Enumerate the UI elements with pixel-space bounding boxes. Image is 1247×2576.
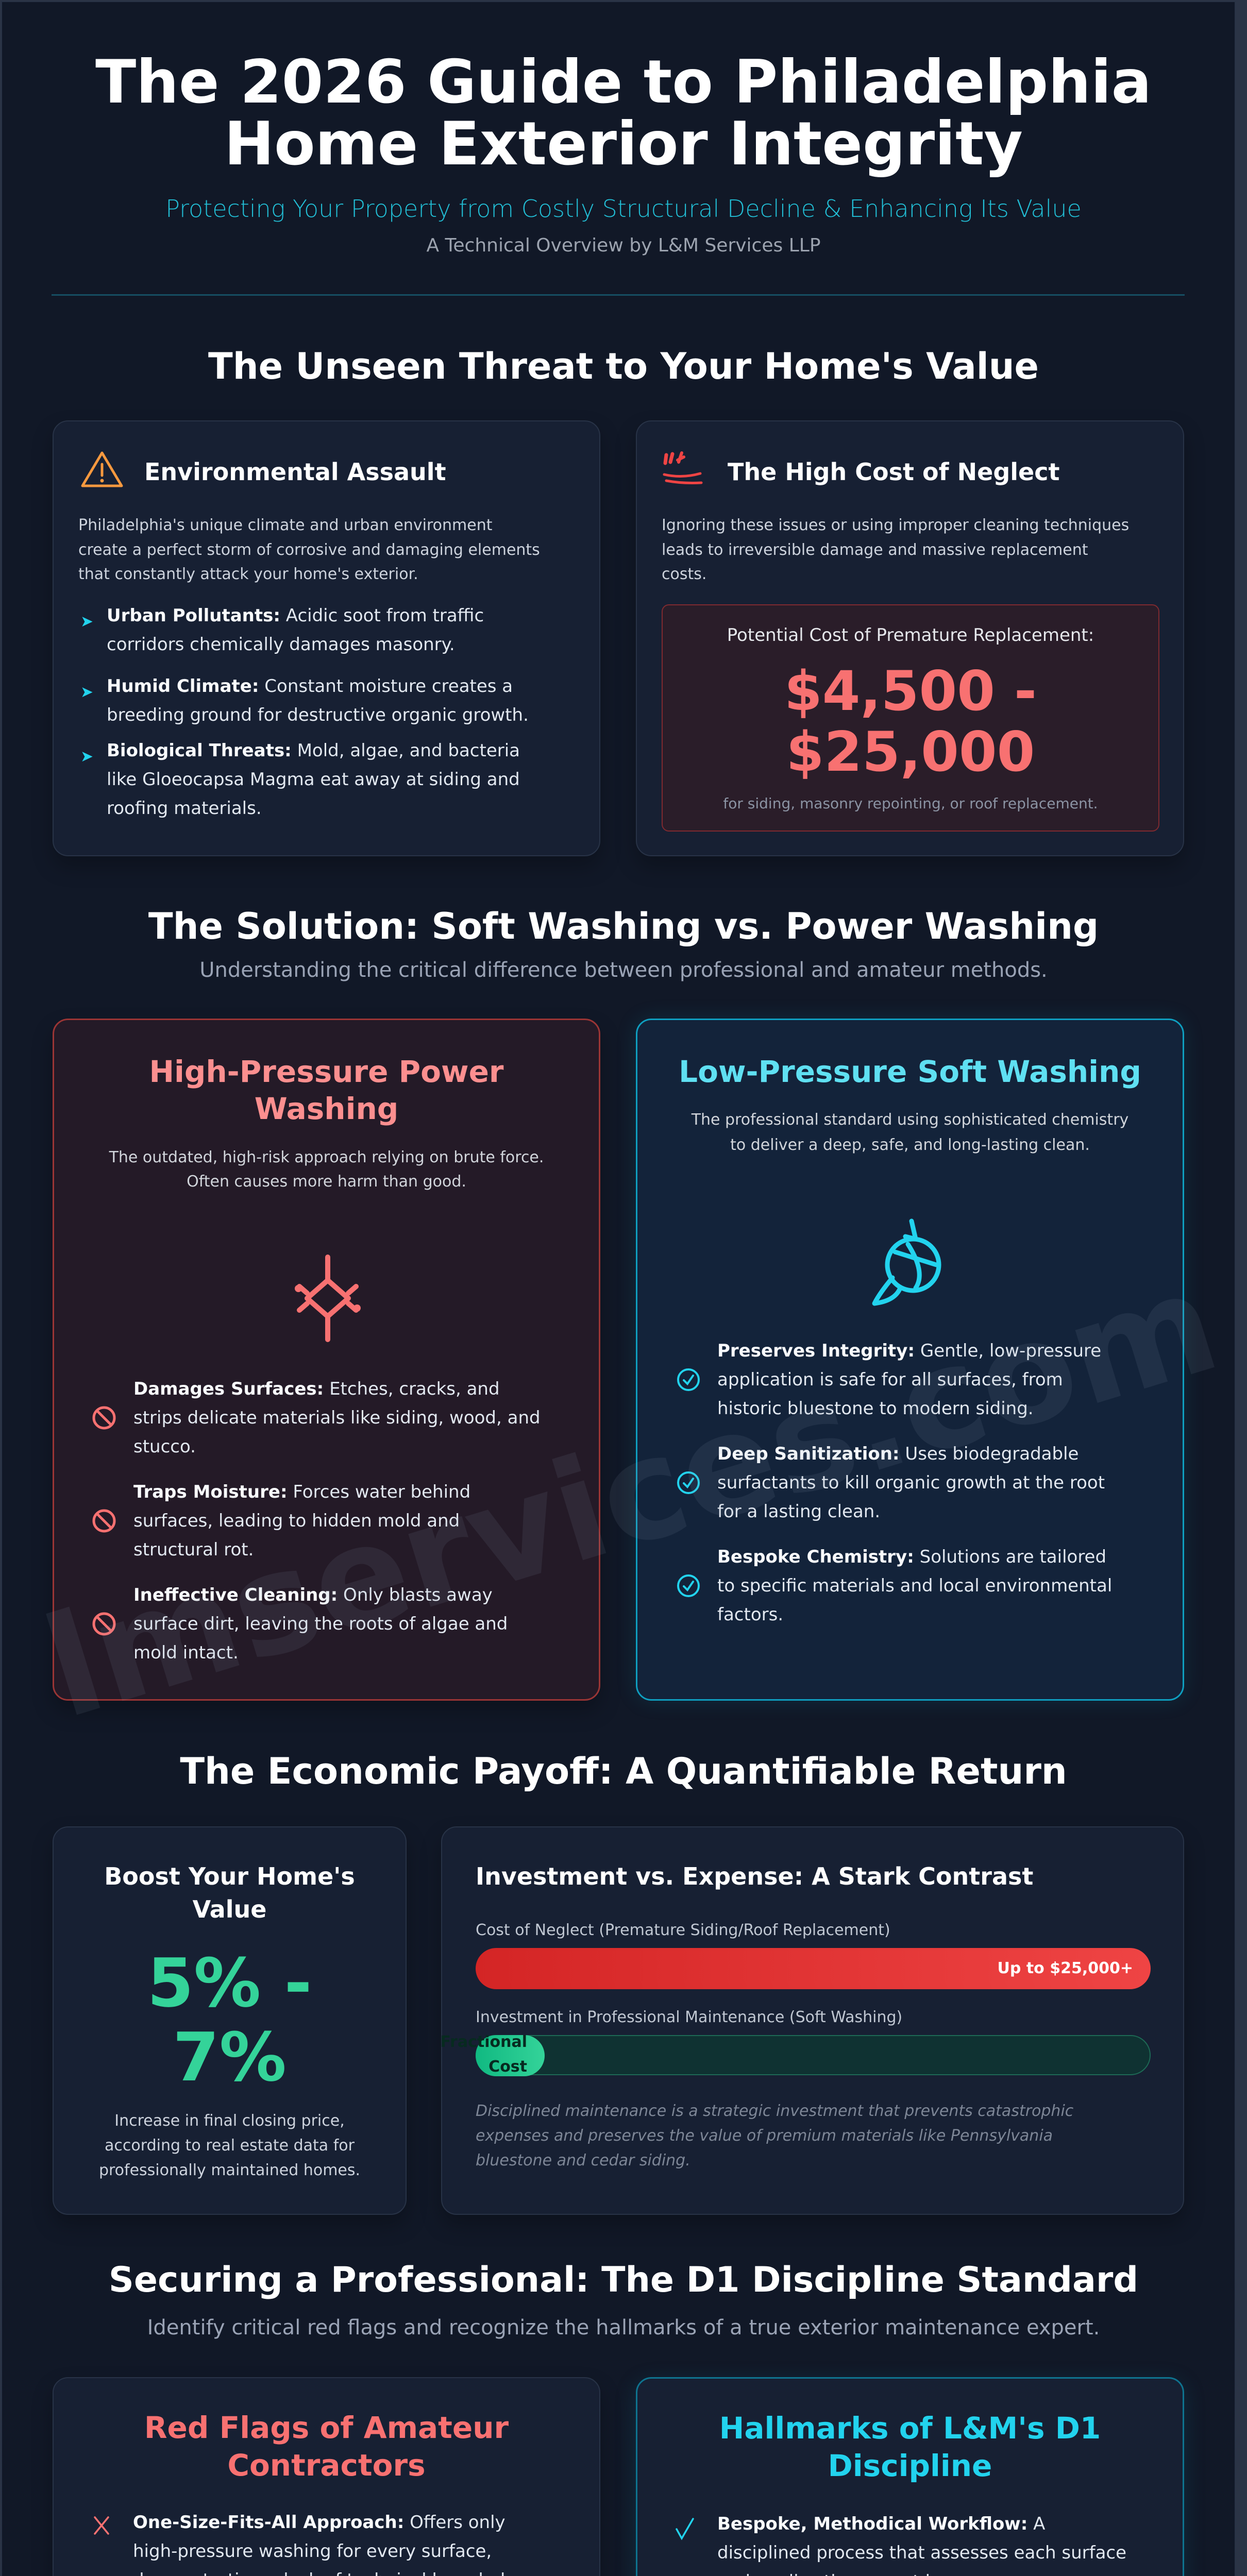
heading: unseen threat: The Unseen Threat to Your Home's Value	[208, 345, 1039, 387]
text block	[78, 516, 540, 583]
watermark: lmservices.com	[28, 1240, 1235, 1750]
text block: to deliver a deep, safe, and long-lasting clean.	[730, 1136, 1090, 1154]
text block	[109, 1148, 544, 1191]
panel: hallmarks	[636, 2377, 1184, 2576]
bullet list: Urban Pollutants: Acidic soot from traffic	[107, 605, 484, 626]
list: red flags: One-Size-Fits-All Approach: Offers only	[133, 2512, 505, 2533]
text block: The professional standard using sophisticated chemistry	[692, 1111, 1128, 1129]
heading: solution: The Solution: Soft Washing vs. Power Washing	[148, 905, 1099, 947]
list: power washing drawbacks: Ineffective Cleaning: Only blasts away	[133, 1585, 493, 1605]
list: power washing drawbacks: mold intact.	[133, 1642, 239, 1663]
heading: economic payoff: The Economic Payoff: A Quantifiable Return	[180, 1750, 1067, 1792]
bar: maintenance cost	[476, 2035, 1151, 2075]
panel: soft washing	[636, 1019, 1184, 1701]
callout: cost box: for siding, masonry repointing, or roof replacement.	[723, 795, 1098, 812]
panel title: Washing	[255, 1091, 398, 1126]
panel title: Red Flags of Amateur	[144, 2410, 509, 2445]
text block: The outdated, high-risk approach relying on brute force.	[109, 1148, 544, 1166]
bullet list: ➤	[80, 748, 93, 766]
subtitle: Protecting Your Property from Costly Structural Decline & Enhancing Its Value	[165, 195, 1082, 223]
text block	[662, 516, 1129, 583]
text block: Ignoring these issues or using improper cleaning techniques	[662, 516, 1129, 534]
panel title: Contractors	[227, 2448, 426, 2483]
stat caption	[99, 2112, 360, 2179]
icon: warning triangle	[81, 451, 123, 487]
panel: boost value	[53, 1826, 407, 2215]
big stat	[147, 1944, 312, 2096]
icon: power spray	[295, 1255, 361, 1342]
panel title: High-Pressure Power	[149, 1054, 504, 1089]
bar: neglect cost: Up to $25,000+	[998, 1959, 1133, 1977]
panel title: Discipline	[828, 2448, 992, 2483]
title	[95, 47, 1152, 179]
note: Disciplined maintenance is a strategic investment that prevents catastrophic	[476, 2102, 1073, 2120]
list: power washing drawbacks: surface dirt, leaving the roots of algae and	[133, 1614, 508, 1634]
title: Home Exterior Integrity	[224, 109, 1023, 179]
stat caption: Increase in final closing price,	[114, 2112, 345, 2130]
list: soft washing benefits: historic bluestone to modern siding.	[717, 1398, 1034, 1419]
panel title	[719, 2411, 1101, 2483]
list: soft washing benefits	[677, 1341, 1112, 1625]
list: soft washing benefits: surfactants to kill organic growth at the root	[717, 1472, 1105, 1493]
list: power washing drawbacks	[93, 1379, 541, 1663]
title: The 2026 Guide to Philadelphia	[95, 47, 1152, 117]
panel: investment vs expense	[441, 1826, 1184, 2215]
stat caption: professionally maintained homes.	[99, 2161, 360, 2179]
text block: Often causes more harm than good.	[187, 1173, 466, 1191]
callout: cost box: Potential Cost of Premature Replacement:	[727, 625, 1094, 646]
bar label: maintenance: Investment in Professional Maintenance (Soft Washing)	[476, 2008, 902, 2026]
panel title	[104, 1862, 355, 1923]
bar text: fractional cost	[440, 2033, 527, 2076]
bar label: neglect: Cost of Neglect (Premature Siding/Roof Replacement)	[476, 1921, 890, 1939]
bar text: fractional cost: Cost	[488, 2058, 527, 2076]
list: soft washing benefits: Preserves Integrity: Gentle, low-pressure	[717, 1341, 1101, 1361]
list: power washing drawbacks: stucco.	[133, 1436, 196, 1457]
callout: cost box	[662, 604, 1159, 832]
panel: high cost of neglect	[636, 420, 1184, 856]
list: power washing drawbacks: Traps Moisture: Forces water behind	[133, 1482, 470, 1502]
text block: that constantly attack your home's exterior.	[78, 565, 418, 583]
panel title	[149, 1054, 504, 1126]
bullet list: ➤	[80, 683, 93, 701]
panel title: Hallmarks of L&M's D1	[719, 2411, 1101, 2446]
list: power washing drawbacks: surfaces, leading to hidden mold and	[133, 1511, 460, 1531]
list: hallmarks: disciplined process that assesses each surface	[717, 2543, 1126, 2563]
panel title: Investment vs. Expense: A Stark Contrast	[476, 1862, 1033, 1890]
bullet list	[80, 605, 529, 819]
list: red flags	[94, 2512, 533, 2576]
big number: $25,000	[786, 720, 1035, 784]
list: power washing drawbacks: strips delicate materials like siding, wood, and	[133, 1408, 541, 1428]
panel title: The High Cost of Neglect	[728, 458, 1060, 486]
list: soft washing benefits: for a lasting clean.	[717, 1501, 880, 1522]
list: power washing drawbacks: Damages Surfaces: Etches, cracks, and	[133, 1379, 500, 1399]
list: hallmarks	[637, 2510, 1183, 2576]
big stat: 7%	[173, 2018, 287, 2096]
list: soft washing benefits: application is safe for all surfaces, from	[717, 1369, 1063, 1390]
section subtitle: Understanding the critical difference between professional and amateur methods.	[199, 958, 1048, 982]
list: hallmarks: Bespoke, Methodical Workflow: A	[717, 2514, 1045, 2534]
section subtitle: Identify critical red flags and recognize the hallmarks of a true exterior maintenance expert.	[147, 2316, 1100, 2340]
text block	[692, 1111, 1128, 1154]
bullet list: like Gloeocapsa Magma eat away at siding and	[107, 769, 520, 790]
icon: neglect	[663, 451, 703, 484]
panel title: Environmental Assault	[144, 458, 446, 486]
heading: securing a professional: Securing a Professional: The D1 Discipline Standard	[109, 2260, 1138, 2300]
panel title: Low-Pressure Soft Washing	[679, 1054, 1141, 1089]
panel: environmental assault: roofing materials.	[107, 798, 262, 819]
bullet list: breeding ground for destructive organic growth.	[107, 705, 529, 725]
panel: power washing	[53, 1019, 600, 1701]
bullet list: corridors chemically damages masonry.	[107, 634, 455, 655]
icon: eco leaf	[872, 1219, 941, 1306]
bullet list: ➤	[80, 613, 93, 631]
stat caption: according to real estate data for	[105, 2137, 355, 2155]
note: bluestone and cedar siding.	[476, 2151, 690, 2170]
byline: A Technical Overview by L&M Services LLP	[426, 235, 821, 256]
panel title	[144, 2410, 509, 2483]
list: soft washing benefits: factors.	[717, 1604, 783, 1625]
note: expenses and preserves the value of premium materials like Pennsylvania	[476, 2127, 1053, 2145]
text block: leads to irreversible damage and massive replacement	[662, 541, 1088, 558]
big stat: 5% -	[147, 1944, 312, 2022]
bullet list: Biological Threats: Mold, algae, and bacteria	[107, 740, 520, 761]
bullet list: Humid Climate: Constant moisture creates a	[107, 676, 513, 697]
list: soft washing benefits: to specific materials and local environmental	[717, 1575, 1112, 1596]
list: soft washing benefits: Bespoke Chemistry: Solutions are tailored	[717, 1547, 1106, 1567]
list: power washing drawbacks: structural rot.	[133, 1539, 254, 1560]
panel title: Boost Your Home's	[104, 1862, 355, 1890]
text block: Philadelphia's unique climate and urban environment	[78, 516, 492, 534]
big number	[784, 659, 1037, 784]
bar text: fractional cost: Fractional	[440, 2033, 527, 2051]
note	[476, 2102, 1073, 2170]
list: soft washing benefits: Deep Sanitization: Uses biodegradable	[717, 1444, 1079, 1464]
panel title: Value	[193, 1895, 266, 1923]
panel: environmental assault	[53, 420, 600, 856]
text block: costs.	[662, 565, 706, 583]
list: red flags: high-pressure washing for every surface,	[133, 2541, 492, 2562]
bar: neglect cost	[476, 1948, 1151, 1989]
panel: red flags	[53, 2377, 600, 2576]
big number: $4,500 -	[784, 659, 1037, 723]
text block: create a perfect storm of corrosive and damaging elements	[78, 541, 540, 558]
